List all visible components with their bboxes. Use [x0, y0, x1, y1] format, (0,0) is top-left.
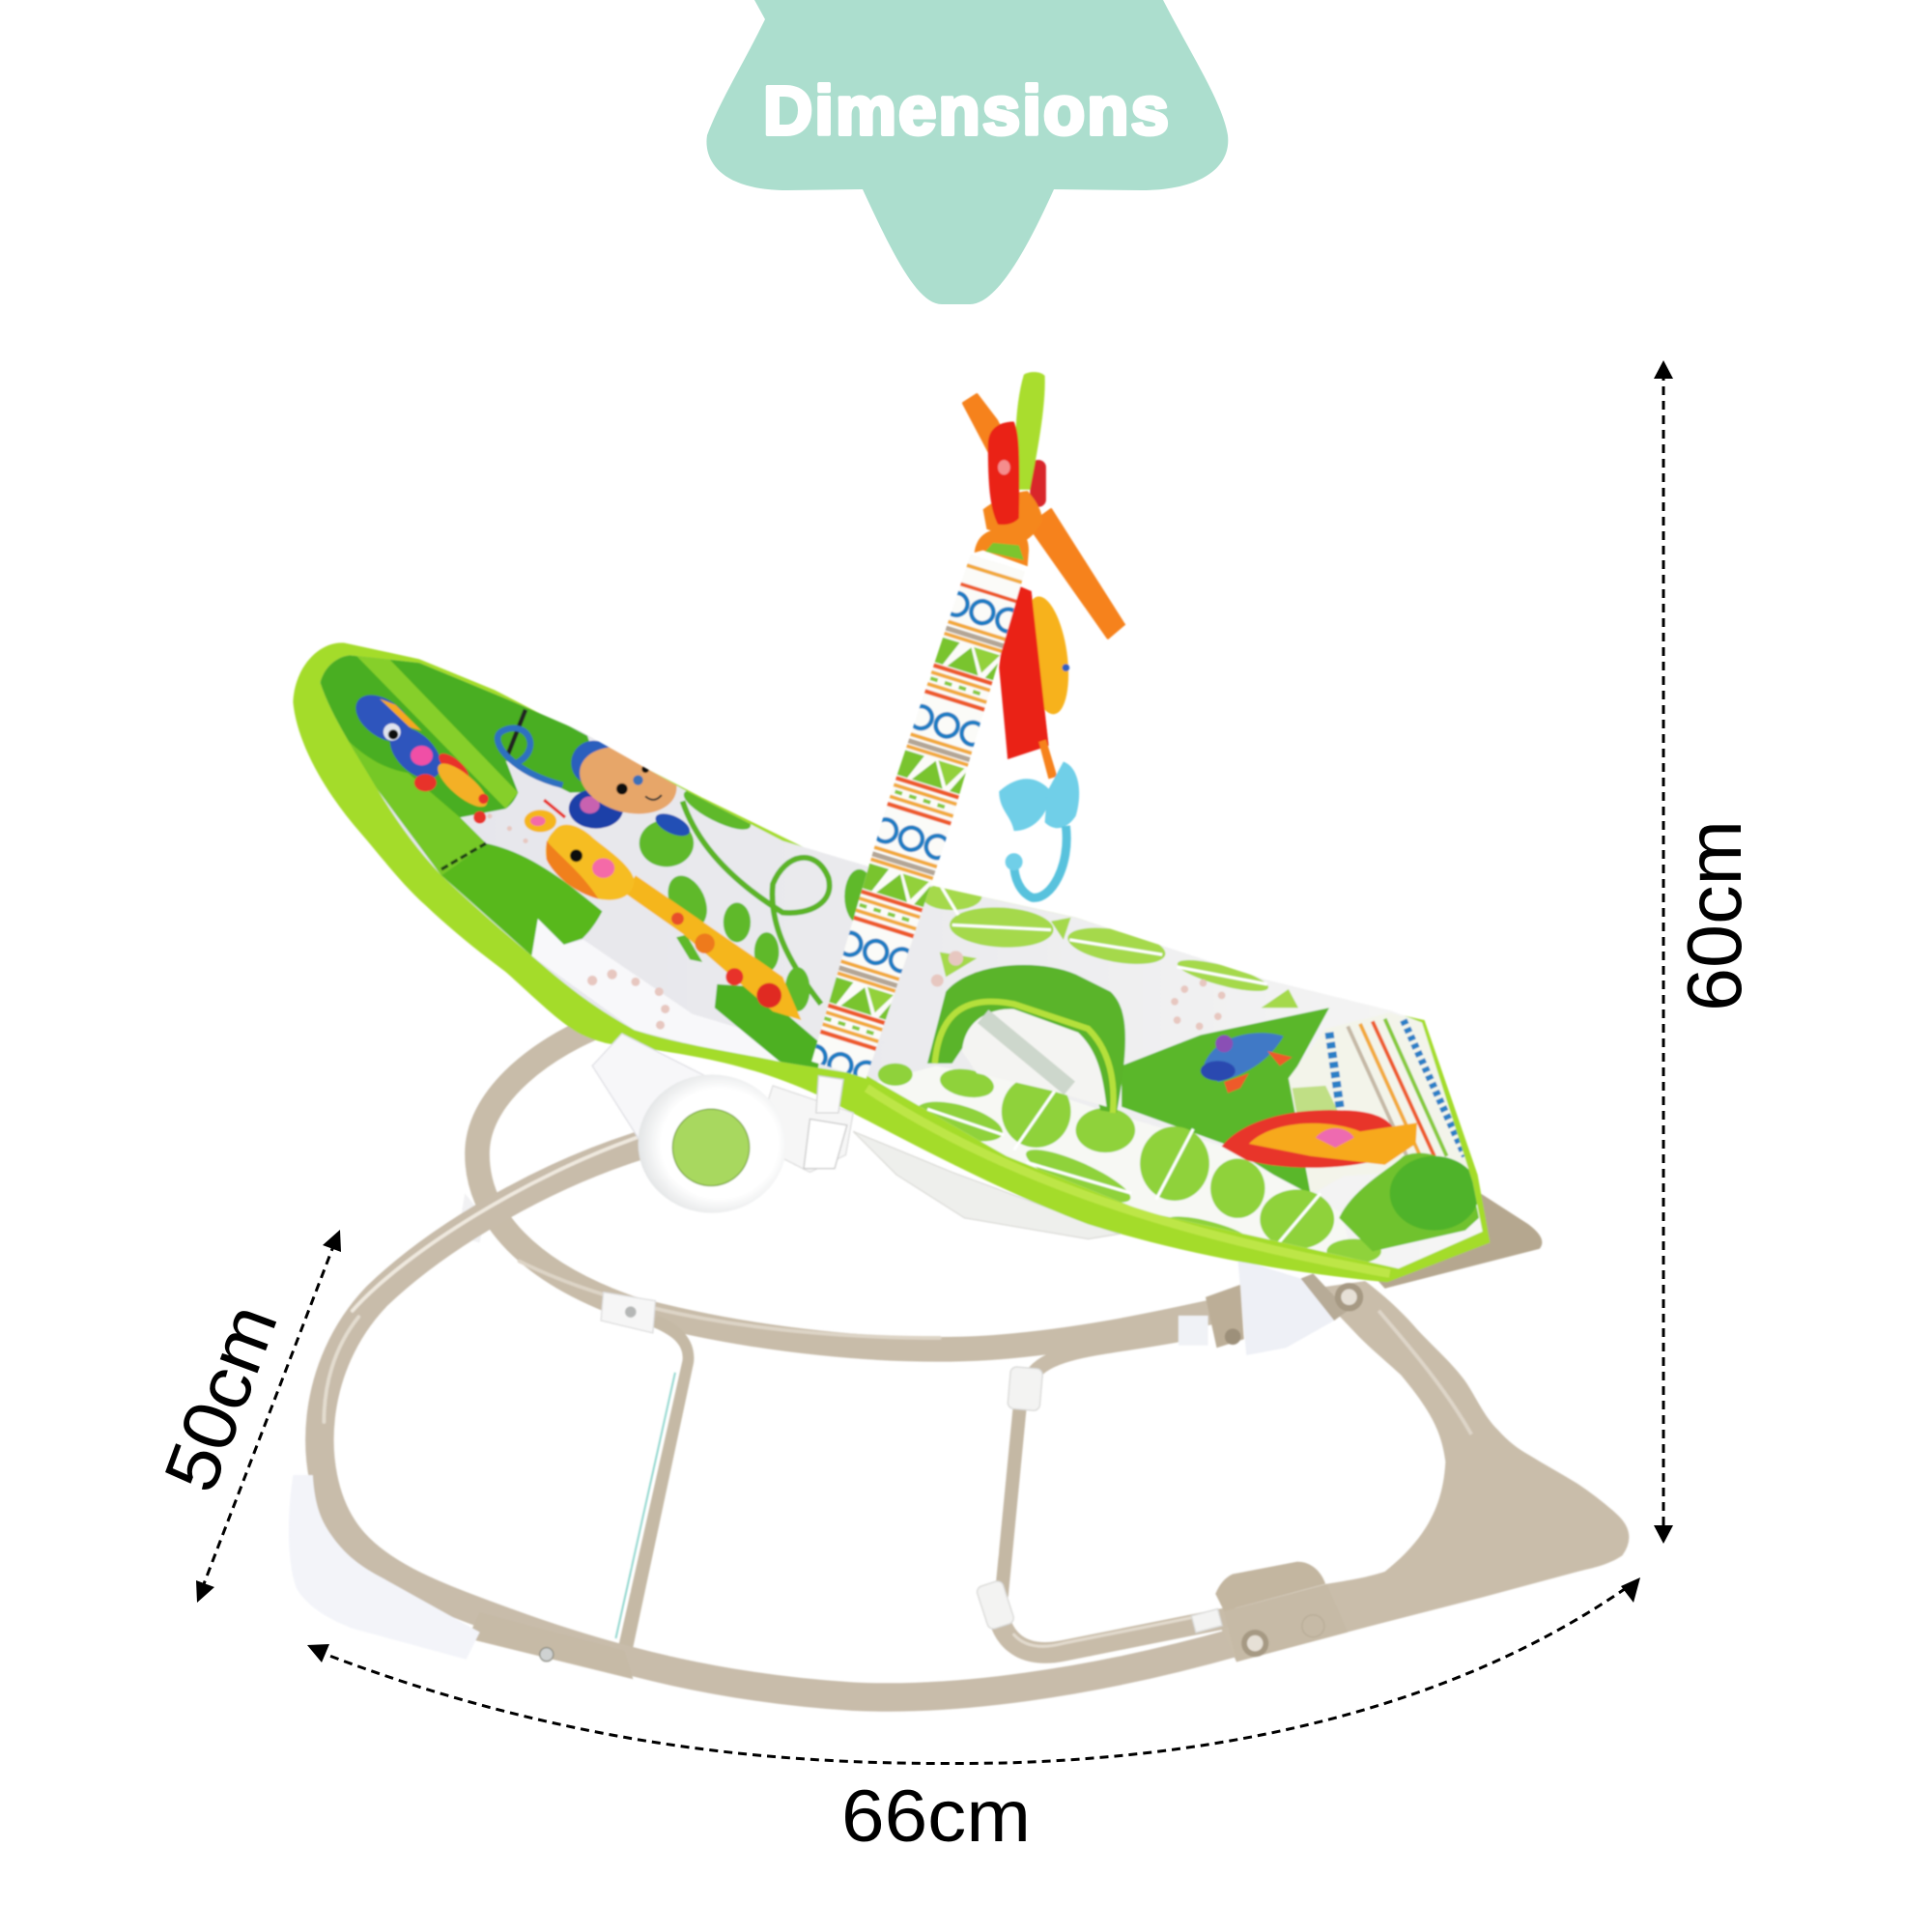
- badge shape: [706, 0, 1228, 304]
- depth arrow: [196, 1230, 341, 1603]
- upper seat leaves: [923, 883, 1298, 1008]
- pole cap: [975, 528, 1029, 566]
- left thin support rod: [618, 1316, 694, 1647]
- height arrow: [1654, 360, 1673, 1544]
- toy arch pole: [772, 551, 1036, 1174]
- darker corner leaf: [1390, 1156, 1479, 1231]
- hinge and clip hardware: [601, 1273, 1363, 1348]
- dashed seam: [441, 843, 486, 869]
- hanging toy: [963, 372, 1124, 897]
- hanging toy rear red panel: [999, 582, 1048, 759]
- center knot: [983, 491, 1042, 542]
- red ring: [988, 421, 1019, 525]
- red panel front: [1002, 591, 1048, 759]
- seat outer lime rim: [293, 642, 1490, 1282]
- head panel green: [319, 654, 590, 875]
- yellow lion rattle: [1017, 594, 1075, 717]
- green foot corner cushion: [1339, 1153, 1479, 1251]
- black and blue vine tail: [497, 710, 562, 785]
- green ring: [1015, 372, 1045, 490]
- giraffe: [525, 800, 801, 1020]
- width arc arrow: [307, 1577, 1640, 1764]
- ring highlight: [998, 460, 1010, 475]
- bracket plate with screw: [1224, 1584, 1348, 1662]
- lower orange bar: [1029, 509, 1124, 638]
- right rocker arm and wedge: [1222, 1281, 1629, 1662]
- monkey: [569, 736, 694, 840]
- cap green trim: [985, 543, 1024, 560]
- rod clips: [976, 1366, 1222, 1633]
- lip leaf veins: [927, 1082, 1321, 1249]
- lower head leaf: [441, 843, 602, 955]
- mesh sling under seat: [853, 1131, 1119, 1239]
- product drawing: infant rocker: [289, 372, 1629, 1697]
- depth dimension: [147, 1230, 341, 1603]
- head panel light strip: [350, 649, 518, 809]
- white side clip on left leg: [458, 1193, 485, 1242]
- leaf veins: [940, 884, 1267, 984]
- seat fabric artwork: [309, 649, 1479, 1286]
- red knob: [1030, 460, 1046, 507]
- orange strap: [1038, 739, 1057, 779]
- front lip band: [877, 1066, 1325, 1253]
- lion: [1219, 1110, 1417, 1168]
- wheel vibration unit: [592, 1034, 853, 1213]
- left rod teal edge: [615, 1373, 675, 1638]
- seat lower rim highlight: [867, 1088, 1390, 1273]
- toucan: [355, 694, 490, 825]
- foot end striped panel: [1289, 1012, 1471, 1194]
- outer rocker tube: [320, 1138, 1236, 1697]
- front lip leaves: [878, 1064, 1381, 1264]
- locking bracket: [1215, 1562, 1325, 1611]
- rattle blue detail: [1063, 664, 1069, 671]
- upper inner tube: [477, 1020, 1218, 1350]
- lower green leaf near giraffe: [714, 983, 819, 1069]
- blue teether: [999, 761, 1079, 897]
- depth label: 50cm: [147, 1293, 294, 1502]
- vines: [683, 801, 830, 1004]
- right seat green area: [1122, 1008, 1329, 1194]
- left lower plate with screw: [468, 1612, 633, 1679]
- height dimension: [1654, 360, 1757, 1544]
- upper orange bar: [963, 394, 1026, 489]
- heading text: Dimensions: [763, 73, 1169, 150]
- height label: 60cm: [1671, 820, 1757, 1011]
- rocker arm highlight: [1378, 1311, 1471, 1435]
- crotch restraint pad: [927, 965, 1125, 1113]
- width label: 66cm: [841, 1776, 1031, 1858]
- rear seat support wedge: [1360, 1188, 1542, 1289]
- head panel left patch: [350, 742, 485, 875]
- pink dots: [487, 813, 1225, 1030]
- seat fabric base: [321, 655, 1483, 1268]
- frog bird figure: [1201, 1033, 1293, 1094]
- right folding rod: [997, 1333, 1231, 1653]
- white foot guard: [289, 1475, 480, 1660]
- width dimension: [307, 1577, 1640, 1858]
- right white side plate: [1237, 1259, 1334, 1355]
- heading badge: [706, 0, 1228, 304]
- white lower cushion: [531, 919, 791, 1069]
- leaves on vines: [639, 783, 874, 1011]
